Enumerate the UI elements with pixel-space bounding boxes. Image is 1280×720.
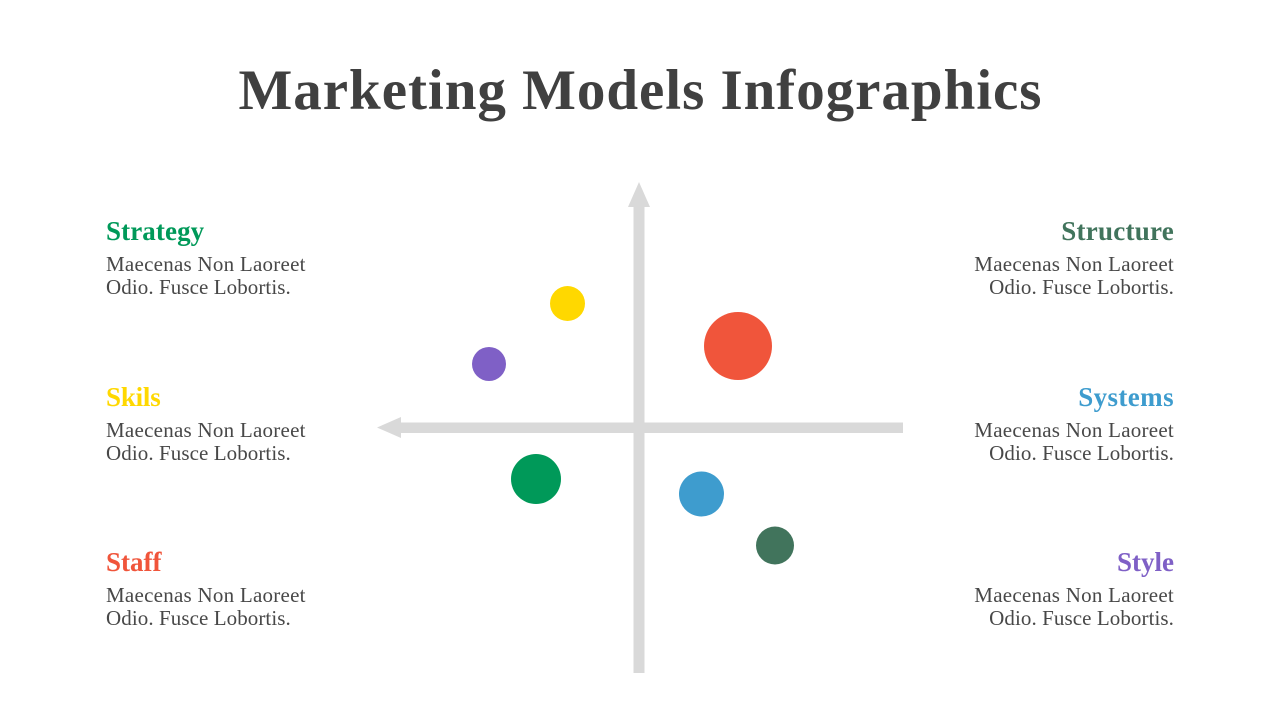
text block: Strategy: Strategy (106, 216, 204, 246)
text block: Skils (106, 382, 306, 465)
arrow: vertical axis (628, 182, 650, 673)
title: Marketing Models Infographics (239, 59, 1042, 122)
text block: Structure (974, 216, 1174, 299)
text block: Style: Maecenas Non Laoreet (974, 583, 1174, 607)
text block: Skils: Odio. Fusce Lobortis. (106, 441, 291, 465)
text block: Systems: Systems (1078, 382, 1174, 412)
text block: Systems (974, 382, 1174, 465)
bubble: green (511, 454, 561, 504)
text block: Structure: Structure (1061, 216, 1174, 246)
text block: Structure: Odio. Fusce Lobortis. (989, 275, 1174, 299)
text block: Staff: Odio. Fusce Lobortis. (106, 606, 291, 630)
text block: Skils: Skils (106, 382, 161, 412)
bubble: purple (472, 347, 506, 381)
text block: Style (974, 547, 1174, 630)
text block: Staff: Staff (106, 547, 162, 577)
text block: Skils: Maecenas Non Laoreet (106, 418, 306, 442)
bubble: red (704, 312, 772, 380)
bubble: blue (679, 472, 724, 516)
text block: Staff: Maecenas Non Laoreet (106, 583, 306, 607)
text block: Systems: Odio. Fusce Lobortis. (989, 441, 1174, 465)
text block: Strategy: Maecenas Non Laoreet (106, 252, 306, 276)
text block: Structure: Maecenas Non Laoreet (974, 252, 1174, 276)
text block: Style: Style (1117, 547, 1174, 577)
bubble: yellow (550, 286, 585, 321)
text block: Systems: Maecenas Non Laoreet (974, 418, 1174, 442)
text block: Strategy (106, 216, 306, 299)
bubble: dark green (756, 526, 794, 564)
text block: Style: Odio. Fusce Lobortis. (989, 606, 1174, 630)
text block: Staff (106, 547, 306, 630)
text block: Strategy: Odio. Fusce Lobortis. (106, 275, 291, 299)
arrow: horizontal axis (377, 417, 903, 438)
